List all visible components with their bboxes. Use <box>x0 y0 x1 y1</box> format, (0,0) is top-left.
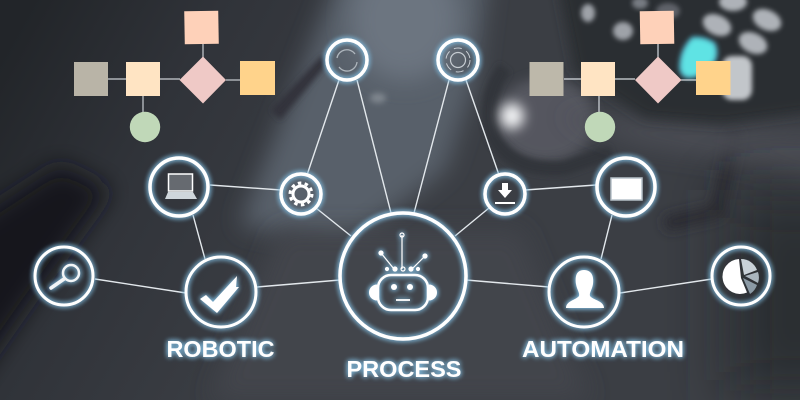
background: blurred glasses <box>495 78 595 162</box>
node: gray square <box>530 62 564 96</box>
network circles with glow <box>35 40 770 339</box>
circle: tablet <box>597 158 655 216</box>
node: cream square <box>581 62 615 96</box>
label: PROCESS: PROCESS <box>346 356 462 382</box>
node: orange square <box>696 61 730 95</box>
flowchart: right <box>530 11 730 142</box>
icon: laptop <box>165 174 197 199</box>
circle: person <box>549 257 619 327</box>
node: green circle <box>130 112 160 142</box>
icon: target rings <box>446 48 470 72</box>
circle: pie <box>712 247 770 305</box>
icon: pie chart <box>722 259 759 294</box>
network connector lines <box>95 80 712 293</box>
circle: refresh <box>327 40 367 80</box>
node: peach square <box>184 11 219 44</box>
icon: tablet <box>611 178 642 200</box>
icon: download <box>495 183 515 204</box>
node: pink diamond <box>180 56 226 104</box>
circle: gear <box>281 174 321 214</box>
node: gray square <box>74 62 108 96</box>
background: blurred calculator <box>560 115 800 190</box>
circle: laptop <box>150 158 208 216</box>
node: pink diamond <box>635 56 682 104</box>
circle: target <box>438 40 478 80</box>
node: orange square <box>240 61 275 95</box>
icon: check mark <box>200 276 239 313</box>
node: green circle <box>585 112 615 142</box>
icon: refresh arrows <box>337 50 357 71</box>
icon: robot <box>370 233 437 310</box>
node: cream square <box>126 62 160 96</box>
flowchart: left <box>74 11 275 142</box>
label: AUTOMATION: AUTOMATION <box>522 336 684 362</box>
circle: center robot <box>340 213 466 339</box>
node: peach square <box>640 11 674 44</box>
circle: magnifier <box>35 247 93 305</box>
circle: check <box>186 257 256 327</box>
icon: gear <box>290 183 312 205</box>
icon: magnifier <box>51 265 79 288</box>
background: cyan calculator key <box>680 38 716 77</box>
label: ROBOTIC: ROBOTIC <box>166 336 274 362</box>
icon: person <box>566 270 604 308</box>
circle: download <box>485 174 525 214</box>
